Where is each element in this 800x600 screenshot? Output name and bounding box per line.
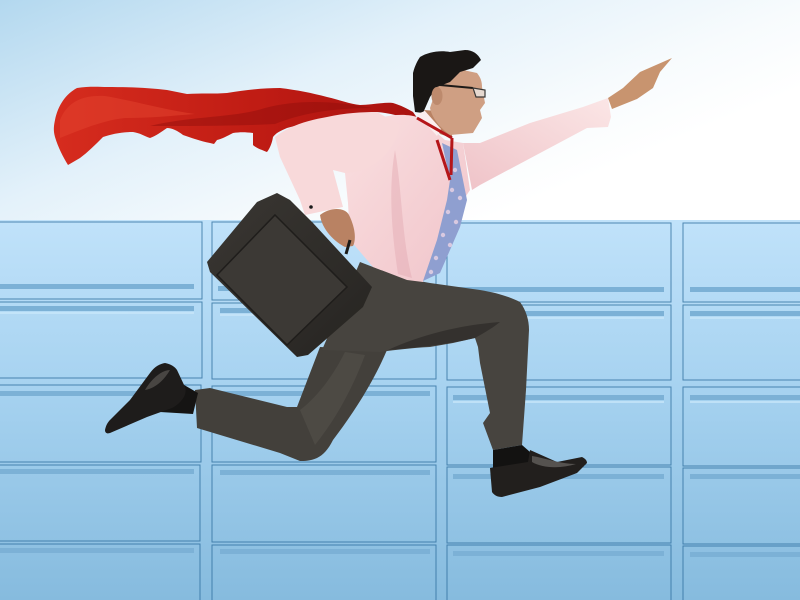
- locker handles: [0, 284, 800, 557]
- briefcase handle strap: [346, 240, 350, 254]
- cape ties: [417, 118, 452, 180]
- tie: [423, 143, 467, 281]
- collar: [417, 111, 441, 136]
- front leg: [322, 262, 529, 450]
- outstretched arm: [463, 58, 672, 190]
- briefcase: [207, 193, 372, 357]
- neck: [424, 110, 452, 138]
- locker wall: [0, 220, 800, 600]
- cape: [54, 87, 420, 165]
- gripping hand: [320, 209, 355, 254]
- locker door outlines: [0, 222, 800, 600]
- shirt torso: [345, 115, 470, 282]
- back shoe: [105, 363, 198, 433]
- sky background: [0, 0, 800, 222]
- bent arm: [275, 112, 400, 215]
- ear: [432, 87, 442, 105]
- hair: [413, 50, 481, 113]
- glasses: [440, 85, 485, 97]
- front shoe: [490, 445, 587, 497]
- bent leg: [195, 347, 387, 461]
- head: [413, 50, 485, 180]
- cuff link: [309, 205, 313, 209]
- locker handle highlights: [0, 312, 800, 403]
- hand: [608, 58, 672, 109]
- face: [430, 70, 485, 135]
